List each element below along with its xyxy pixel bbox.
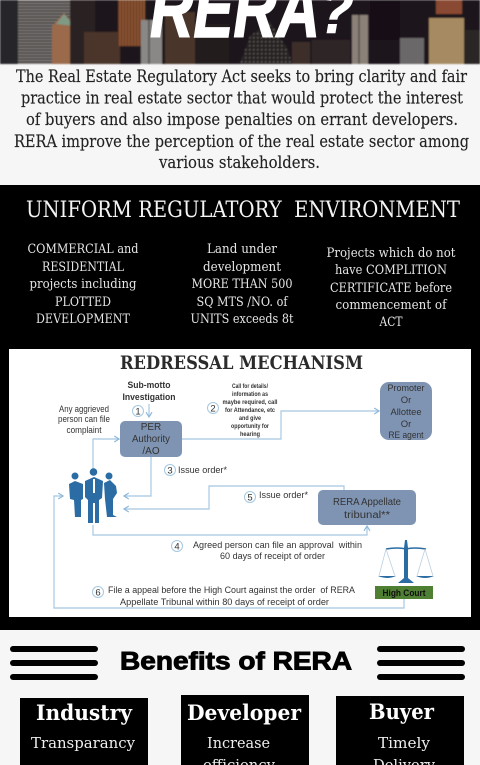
text column: commercial and residential: COMMERCIAL and <box>28 242 138 257</box>
label: sub-motto investigation: Investigation <box>122 392 176 403</box>
text column: land under development: MORE THAN 500 <box>192 277 292 292</box>
step 1 marker: 1 <box>135 406 141 418</box>
step 1 marker <box>132 406 144 418</box>
step 6 label: File a appeal before the High Court against the order of RERA <box>108 585 355 595</box>
card: developer: Developer <box>187 700 302 725</box>
label: any aggrieved person: Any aggrieved <box>59 404 109 414</box>
card: developer: Increase <box>207 734 270 752</box>
label: high court: High Court <box>382 588 426 599</box>
diagram contents <box>54 380 434 608</box>
card: developer <box>181 695 309 765</box>
intro paragraph: various stakeholders. <box>158 153 320 173</box>
label: call for details: Call for details/ <box>232 384 268 390</box>
label: any aggrieved person <box>58 404 110 435</box>
text column: commercial and residential: projects including <box>30 277 136 292</box>
box: promoter or allottee or RE agent: Or <box>401 395 411 406</box>
step 5 label <box>244 490 308 504</box>
text column: land under development: UNITS exceeds 8t <box>190 312 294 327</box>
label: call for details: hearing <box>240 432 260 438</box>
text column: projects without completion certificate: commencement of <box>336 298 448 313</box>
text column: commercial and residential: RESIDENTIAL <box>42 260 124 275</box>
step 6 label: Appellate Tribunal within 80 days of receipt of order <box>120 597 329 607</box>
step 6 label <box>92 585 355 607</box>
box: PER authority: PER <box>141 422 161 433</box>
text column: land under development: SQ MTS /NO. of <box>196 295 289 310</box>
benefits heading rules: left <box>10 646 98 680</box>
step 5 label: 5 <box>247 492 253 504</box>
step 3 label: 3 <box>167 466 173 476</box>
box: promoter or allottee or RE agent: Or <box>401 419 411 430</box>
card: industry: Transparancy <box>31 734 136 752</box>
box: PER authority: Authority <box>132 434 170 445</box>
header photo: city skyline <box>0 0 480 64</box>
text column: commercial and residential: PLOTTED <box>55 295 111 310</box>
card: buyer: Timely <box>378 734 431 752</box>
label: call for details: and give <box>239 416 262 422</box>
text column: projects without completion certificate: CERTIFICATE before <box>330 281 452 296</box>
label: call for details <box>222 384 278 438</box>
flow connectors <box>54 404 404 608</box>
intro paragraph <box>14 67 469 173</box>
step 6 label: 6 <box>95 588 101 598</box>
benefits heading rules: right <box>377 646 465 680</box>
step 4 label: Agreed person can file an approval within <box>193 540 362 550</box>
text column: projects without completion certificate: have COMPLITION <box>335 263 447 278</box>
step 3 label: Issue order* <box>178 465 227 475</box>
text column: land under development <box>190 242 294 327</box>
box: RERA appellate tribunal: tribunal** <box>344 510 390 521</box>
card: buyer <box>336 696 464 765</box>
step 2 marker <box>208 402 218 414</box>
box: promoter or allottee or RE agent: Promoter <box>388 383 424 394</box>
text column: projects without completion certificate: ACT <box>379 315 403 330</box>
label: any aggrieved person: person can file <box>58 414 110 424</box>
card: buyer: Buyer <box>369 699 435 724</box>
box: promoter or allottee or RE agent: Allottee <box>390 407 422 418</box>
step 2 marker: 2 <box>210 404 216 414</box>
text column: land under development: development <box>203 260 282 275</box>
card: industry <box>20 698 148 765</box>
box: RERA appellate tribunal: RERA Appellate <box>333 497 401 508</box>
step 4 label: 4 <box>174 542 180 552</box>
label: sub-motto investigation: Sub-motto <box>128 380 171 391</box>
label: call for details: maybe required, call <box>222 400 278 406</box>
text column: commercial and residential: DEVELOPMENT <box>36 312 130 327</box>
label: sub-motto investigation <box>122 380 176 403</box>
box: PER authority: /AO <box>142 446 160 457</box>
heading: redressal mechanism: REDRESSAL MECHANISM <box>120 352 363 374</box>
text column: land under development: Land under <box>207 242 278 257</box>
panel: redressal mechanism diagram <box>9 349 471 617</box>
text column: commercial and residential <box>28 242 138 327</box>
step 3 label <box>164 464 227 476</box>
card: industry: Industry <box>36 700 133 725</box>
label: call for details: for Attendance, etc <box>225 408 276 414</box>
step 4 label: 60 days of receipt of order <box>220 551 325 561</box>
box: RERA appellate tribunal <box>318 490 416 525</box>
step 4 label <box>172 540 362 561</box>
text column: projects without completion certificate: Projects which do not <box>326 246 456 261</box>
text column: projects without completion certificate <box>326 246 456 330</box>
box: PER authority <box>120 421 182 457</box>
heading: benefits of RERA: Benefits of RERA <box>120 648 352 676</box>
step 5 label: Issue order* <box>259 490 308 500</box>
panel: uniform regulatory environment <box>0 185 480 630</box>
icon: scales of justice <box>378 540 434 583</box>
box: promoter or allottee or RE agent <box>380 382 432 441</box>
box: promoter or allottee or RE agent: RE agent <box>388 430 424 441</box>
label: call for details: opportunity for <box>231 424 270 430</box>
label: call for details: information as <box>232 392 269 398</box>
icon: three people <box>69 468 117 523</box>
label: any aggrieved person: complaint <box>66 425 102 435</box>
